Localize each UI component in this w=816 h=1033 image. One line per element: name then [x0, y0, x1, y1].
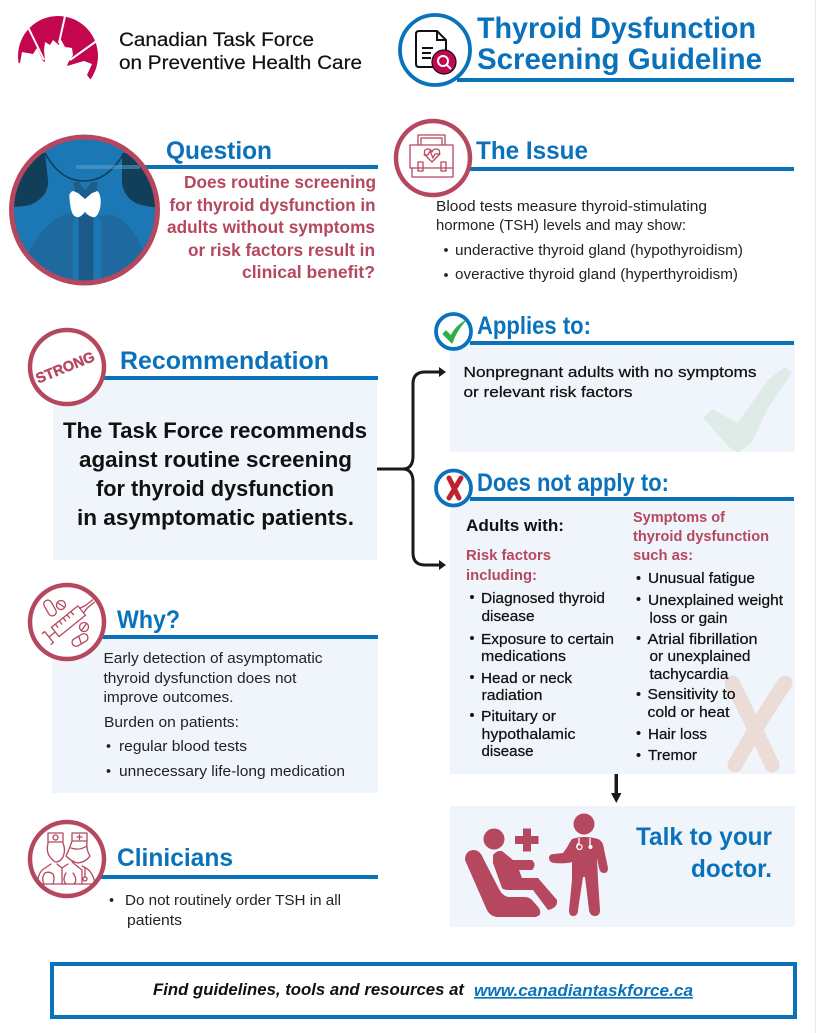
question text: Does routine screening: [184, 172, 376, 192]
column: symptoms: Tremor: [648, 747, 697, 764]
talk to your doctor text: Talk to your: [636, 823, 772, 851]
footer box: [52, 964, 795, 1017]
icon: red x in circle: [436, 470, 471, 506]
icon: document with magnifier: [400, 15, 470, 85]
panel: does not apply to: [436, 469, 795, 774]
issue text: underactive thyroid gland (hypothyroidism): [455, 242, 743, 259]
icon: large faded x: [732, 683, 785, 765]
column: symptoms: tachycardia: [650, 666, 729, 683]
issue text: Blood tests measure thyroid-stimulating: [436, 198, 707, 215]
icon: thyroid illustration: [8, 137, 162, 290]
column: symptoms: thyroid dysfunction: [633, 528, 769, 545]
icon: syringe and pills: [30, 585, 104, 659]
icon: strong stamp: [30, 330, 104, 404]
why text: unnecessary life-long medication: [119, 763, 345, 780]
icon: patient and doctor: [465, 814, 608, 917]
column: symptoms: Unexplained weight: [648, 592, 784, 609]
issue text: hormone (TSH) levels and may show:: [436, 217, 686, 234]
recommendation text: The Task Force recommends: [63, 418, 367, 443]
icon: strong stamp: STRONG: [34, 349, 97, 387]
title text: Screening Guideline: [477, 43, 762, 76]
question text: or risk factors result in: [188, 240, 375, 260]
panel: why: [30, 585, 378, 793]
panel: applies to: [436, 312, 795, 452]
applies to text: or relevant risk factors: [464, 384, 632, 401]
issue text: [436, 198, 743, 283]
title text: Thyroid Dysfunction: [477, 12, 756, 45]
arrow: bracket to applies and does not apply: [377, 367, 446, 570]
logo: Canadian Task Force maple leaf: [10, 14, 100, 100]
icon: large faded check: [705, 369, 790, 451]
clinicians text: Do not routinely order TSH in all: [125, 892, 341, 909]
column: symptoms: cold or heat: [648, 704, 730, 721]
question text: [167, 172, 376, 282]
organization name: Canadian Task Force: [119, 30, 314, 51]
applies to text: [464, 364, 756, 401]
column: symptoms: Unusual fatigue: [648, 570, 755, 587]
column: symptoms: Atrial fibrillation: [648, 631, 758, 648]
column: risk factors: hypothalamic: [482, 726, 576, 743]
column: symptoms: loss or gain: [650, 610, 728, 627]
icon: two clinicians: [30, 822, 104, 896]
column: risk factors: disease: [482, 743, 534, 760]
column: risk factors: Diagnosed thyroid: [481, 590, 605, 607]
question text: clinical benefit?: [242, 262, 375, 282]
recommendation text: for thyroid dysfunction: [96, 476, 334, 501]
recommendation text: against routine screening: [79, 447, 352, 472]
panel: talk to your doctor: [450, 806, 795, 927]
column: symptoms: or unexplained: [650, 648, 750, 665]
column: risk factors: radiation: [482, 687, 542, 704]
title with document icon: [400, 12, 794, 85]
column: risk factors: [466, 517, 614, 760]
title text: [477, 12, 762, 76]
footer link: www.canadiantaskforce.ca: [474, 982, 693, 1000]
panel: the issue: [396, 121, 794, 283]
heading: why: Why?: [117, 606, 180, 634]
why text: Burden on patients:: [104, 714, 239, 731]
column: symptoms: [633, 509, 784, 764]
panel: question: [8, 137, 378, 290]
icon: medical case: [396, 121, 470, 195]
recommendation text: [63, 418, 367, 530]
issue text: overactive thyroid gland (hyperthyroidism): [455, 266, 738, 283]
clinicians text: patients: [127, 912, 182, 929]
why text: Early detection of asymptomatic: [104, 650, 323, 667]
panel: recommendation: [30, 330, 378, 560]
heading: clinicians: Clinicians: [117, 844, 233, 872]
organization name: on Preventive Health Care: [119, 53, 362, 74]
column: symptoms: Hair loss: [648, 726, 707, 743]
column: risk factors: medications: [481, 648, 566, 665]
why text: improve outcomes.: [104, 689, 234, 706]
heading: the issue: The Issue: [476, 137, 588, 165]
panel: clinicians: [30, 822, 378, 929]
column: symptoms: such as:: [633, 547, 693, 564]
why text: regular blood tests: [119, 738, 247, 755]
arrow: down to talk to your doctor: [611, 774, 622, 803]
column: risk factors: Risk factors: [466, 547, 551, 564]
heading: does not apply to: Does not apply to:: [477, 469, 669, 497]
column: risk factors: disease: [482, 608, 534, 625]
heading: recommendation: Recommendation: [120, 347, 329, 375]
clinicians text: [110, 892, 341, 929]
applies to text: Nonpregnant adults with no symptoms: [464, 364, 756, 381]
footer text: Find guidelines, tools and resources at: [153, 981, 466, 999]
talk to your doctor text: doctor.: [691, 855, 772, 883]
talk to your doctor text: [636, 823, 772, 883]
recommendation text: in asymptomatic patients.: [77, 505, 354, 530]
column: symptoms: Sensitivity to: [648, 686, 736, 703]
icon: green check in circle: [436, 314, 471, 349]
question text: for thyroid dysfunction in: [170, 195, 376, 215]
why text: [104, 650, 345, 780]
column: risk factors: Pituitary or: [481, 708, 556, 725]
heading: applies to: Applies to:: [477, 312, 591, 340]
column: risk factors: Exposure to certain: [481, 631, 614, 648]
column: risk factors: including:: [466, 567, 537, 584]
why text: thyroid dysfunction does not: [104, 670, 297, 687]
column: risk factors: Head or neck: [481, 670, 573, 687]
question text: adults without symptoms: [167, 217, 375, 237]
organization name: [119, 30, 362, 74]
column: symptoms: Symptoms of: [633, 509, 726, 526]
heading: question: Question: [166, 137, 272, 165]
column: risk factors: Adults with:: [466, 517, 564, 535]
